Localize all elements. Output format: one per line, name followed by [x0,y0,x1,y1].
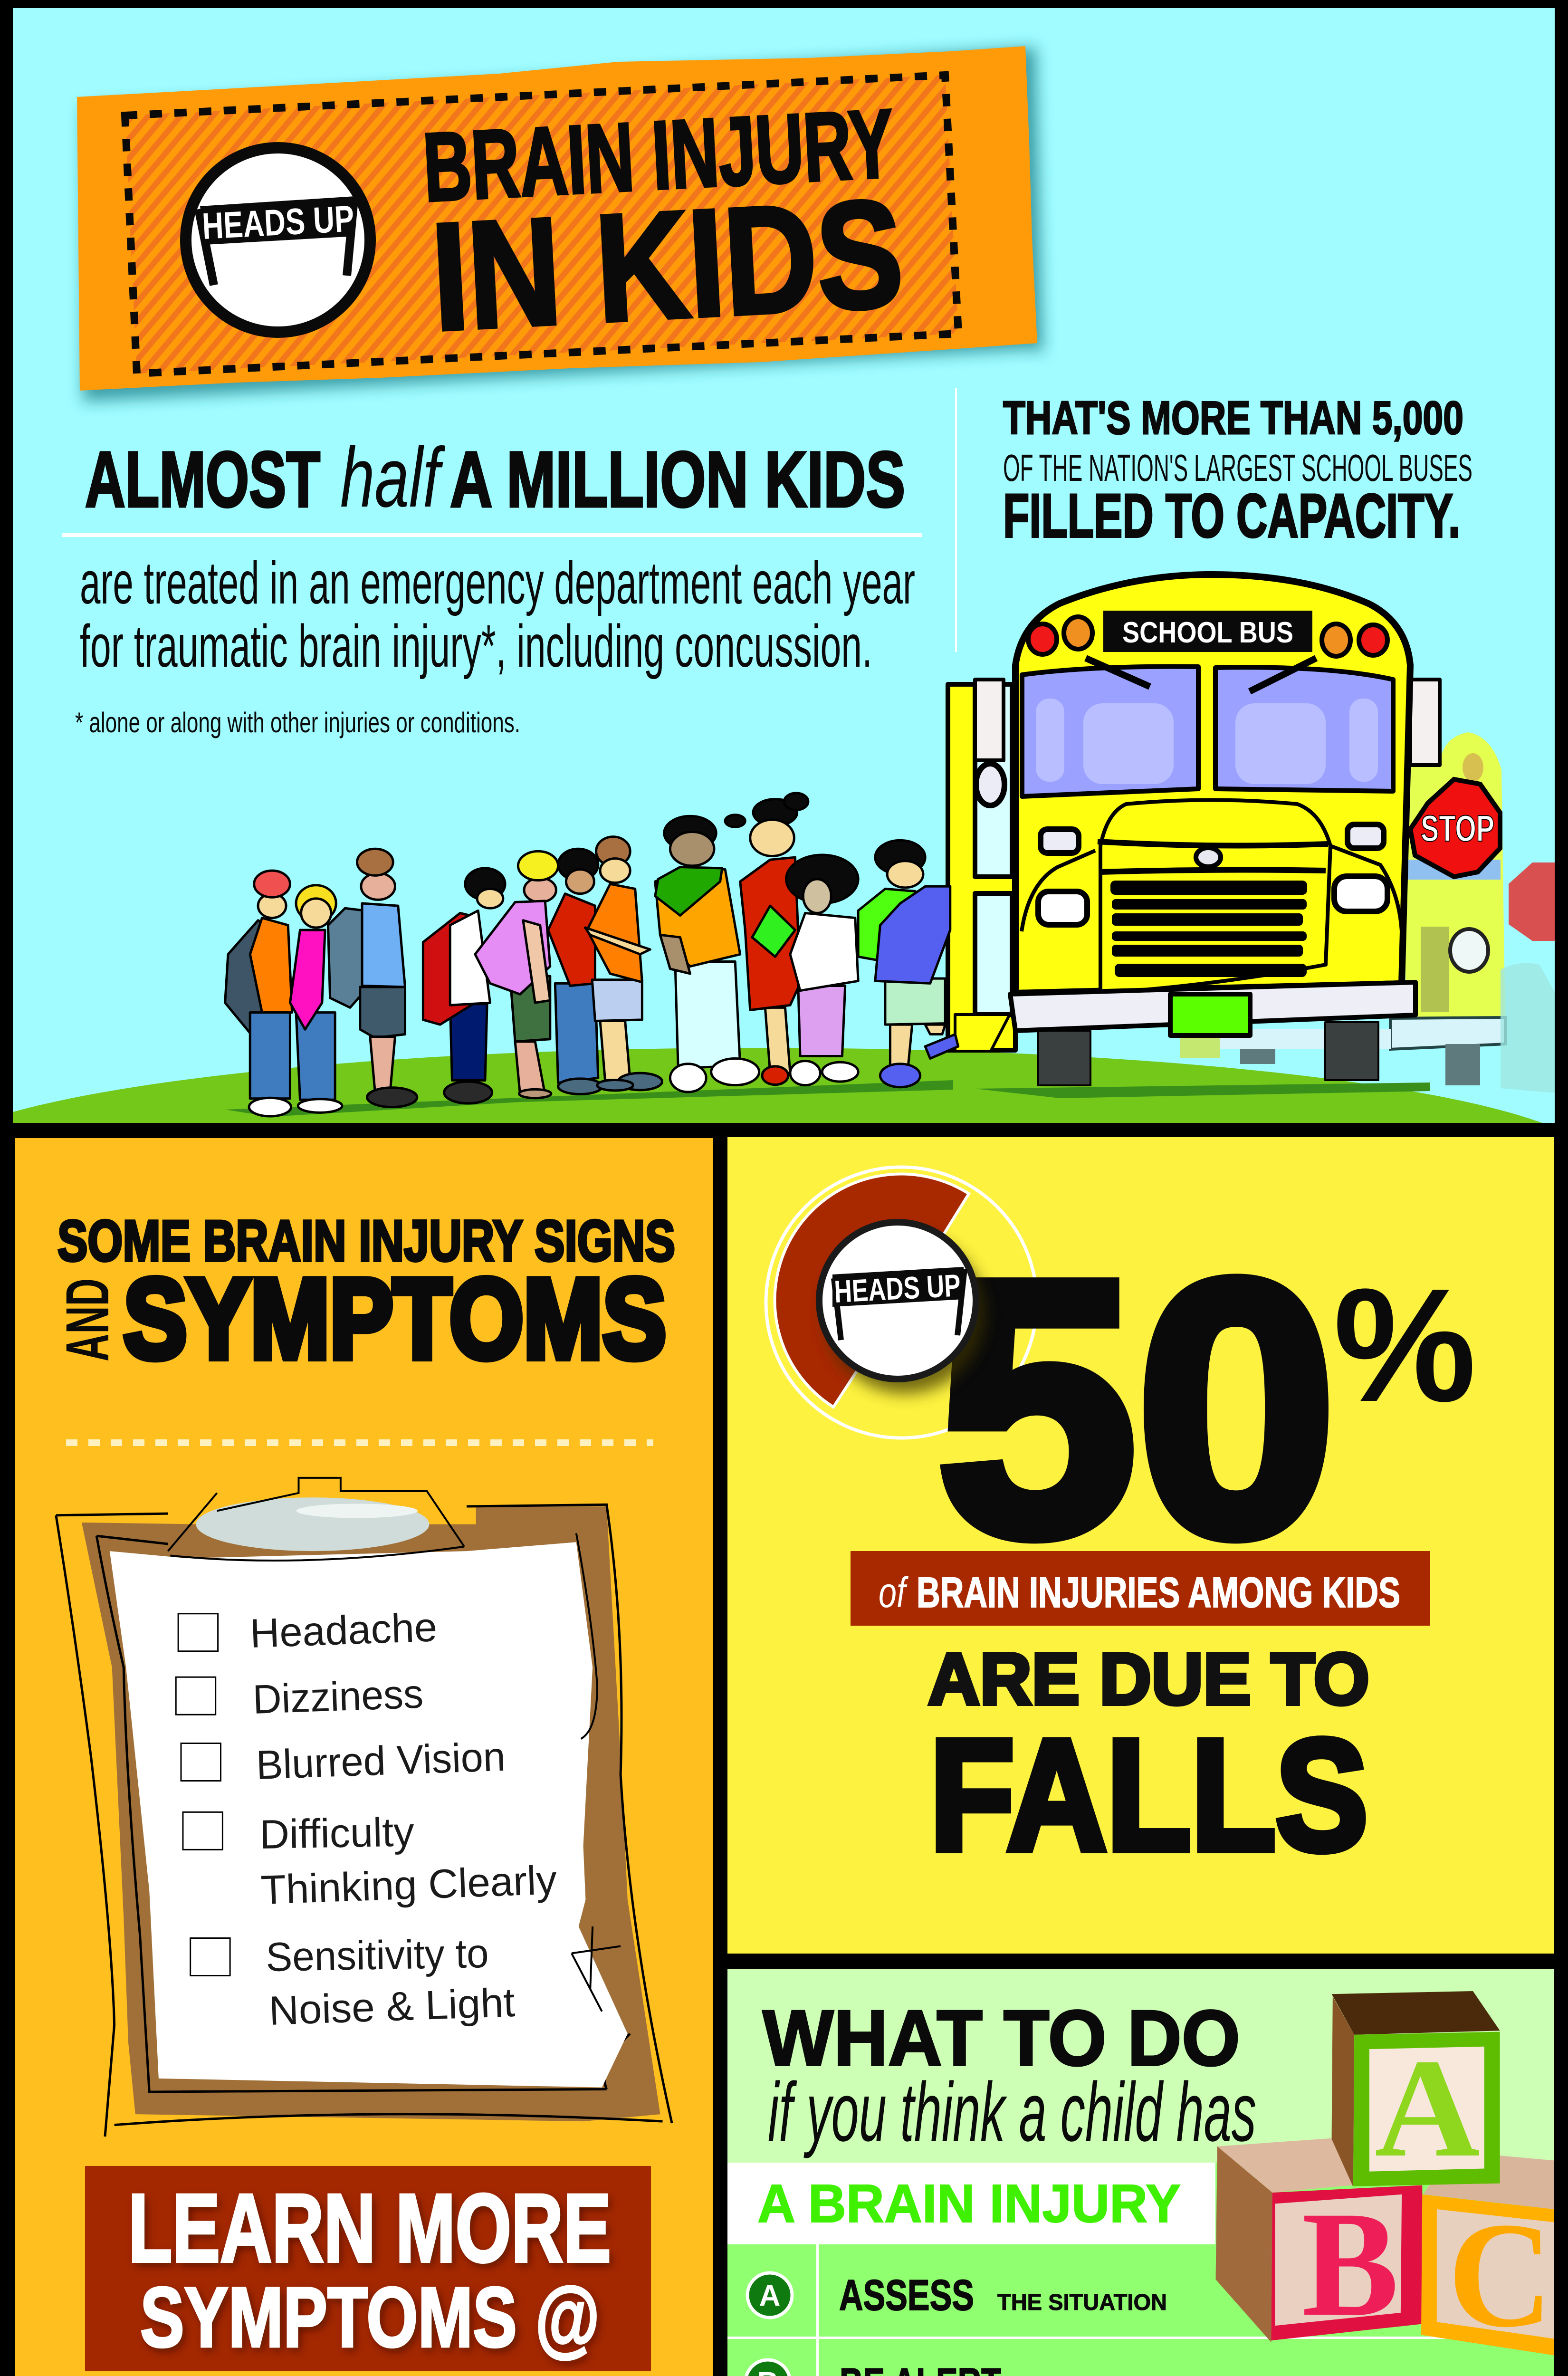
kid 2 [290,885,342,1112]
checklist text: Noise & Light [268,1980,516,2034]
heading: and: AND [54,1278,122,1361]
text: school buses comparison [1003,392,1472,550]
icon: letter blocks [1216,1991,1554,2358]
logo: Heads Up badge: HEADS UP [833,1267,961,1309]
bus grille [1110,881,1307,977]
block A [1332,1991,1500,2187]
banner: of brain injuries among kids: BRAIN INJURIES AMONG KIDS [917,1569,1400,1617]
callout: learn more symptoms: LEARN MORE [131,2178,614,2286]
row: be alert [746,2360,1512,2376]
checklist text: Blurred Vision [255,1734,506,1788]
icon: stop sign [1410,779,1500,877]
bus bumper [1010,982,1415,1031]
ground shadows [225,1080,1430,1117]
checkboxes [176,1614,230,1976]
text: treated in emergency department: are treated in an emergency department each year [80,549,915,616]
block B [1216,2138,1424,2342]
logo: Heads Up [186,148,370,332]
bus sign: SCHOOL BUS [1122,616,1293,649]
kid 9 [725,793,808,1085]
checklist text: Headache [249,1604,438,1657]
checklist text: Thinking Clearly [260,1857,557,1913]
heading: a brain injury: A BRAIN INJURY [757,2174,1181,2233]
stat: 50: 50 [937,1207,1336,1610]
text: treated in emergency department: for traumatic brain injury*, including concussion. [80,613,872,680]
callout: learn more symptoms: LEARN MORE [128,2174,611,2282]
icon: background buses [1180,732,1555,1093]
illustration: group of kids [225,793,958,1116]
heading: what to do: WHAT TO DO [763,1994,1240,2082]
title: in kids: IN KIDS [428,168,907,362]
heading: almost half a million kids: ALMOST [85,436,320,524]
row: assess: THE SITUATION [997,2290,1167,2315]
logo: Heads Up: HEADS UP [201,197,355,247]
icon: letter blocks: A [1375,2030,1480,2186]
stat: percent sign: % [1333,1255,1476,1436]
heading: almost half a million kids: A MILLION KIDS [450,436,905,524]
panel: 50 percent falls [727,1137,1554,1954]
title: brain injury: BRAIN INJURY [421,89,896,222]
icon: stop sign: STOP [1421,807,1494,849]
icon: clipboard [56,1478,672,2136]
checklist text: Dizziness [252,1671,424,1723]
kid 6 [548,849,602,1094]
row: assess [747,2271,1167,2319]
heading: almost half a million kids: half [340,430,445,525]
checklist text: Sensitivity to [266,1931,489,1980]
checklist text [249,1604,557,2034]
row: assess: A [759,2280,780,2312]
panel: what to do [727,1969,1554,2376]
kid 11 [858,840,958,1087]
callout: learn more symptoms: SYMPTOMS @ [140,2270,600,2365]
heading: some brain injury signs: SOME BRAIN INJURY SIGNS [57,1208,675,1273]
bus lights [1028,617,1387,656]
callout: learn more symptoms: SYMPTOMS @ [143,2273,602,2368]
panel: signs and symptoms [15,1138,713,2376]
row: assess: ASSESS [839,2271,974,2319]
kid 7 [585,837,662,1091]
text: are due to: ARE DUE TO [928,1638,1369,1720]
callout: learn more symptoms [85,2166,651,2371]
text: if you think a child has: if you think a child has [768,2066,1256,2159]
icon: letter blocks: C [1448,2191,1553,2358]
checklist text: Difficulty [259,1809,414,1858]
icon: school bus [948,575,1440,1085]
chart: half ring [766,1167,1037,1438]
bus headlights [1038,824,1387,925]
ticket: title banner [77,46,1043,402]
text: falls: FALLS [930,1707,1368,1883]
heading: almost half a million kids [85,430,905,525]
text: treated in emergency department [80,549,915,680]
kid 4 [423,868,505,1103]
bus hood [1100,800,1330,993]
kid 10 [786,855,858,1085]
heading: symptoms: SYMPTOMS [124,1256,666,1382]
footnote: * alone or along with other injuries or conditions. [75,707,520,738]
ground [0,1048,1568,1281]
icon: letter blocks: B [1302,2180,1399,2347]
panel: hero [13,8,1555,1123]
banner: of brain injuries among kids [851,1551,1430,1626]
kid 1 [225,871,292,1116]
kid 5 [475,851,558,1098]
block C [1421,2156,1554,2355]
icon: distant stop sign [1509,862,1555,941]
kid 8 [655,816,759,1092]
logo: Heads Up badge [819,1222,985,1394]
bus windshield [1022,658,1393,796]
kid 3 [328,849,417,1107]
banner: of brain injuries among kids: of [879,1569,908,1617]
